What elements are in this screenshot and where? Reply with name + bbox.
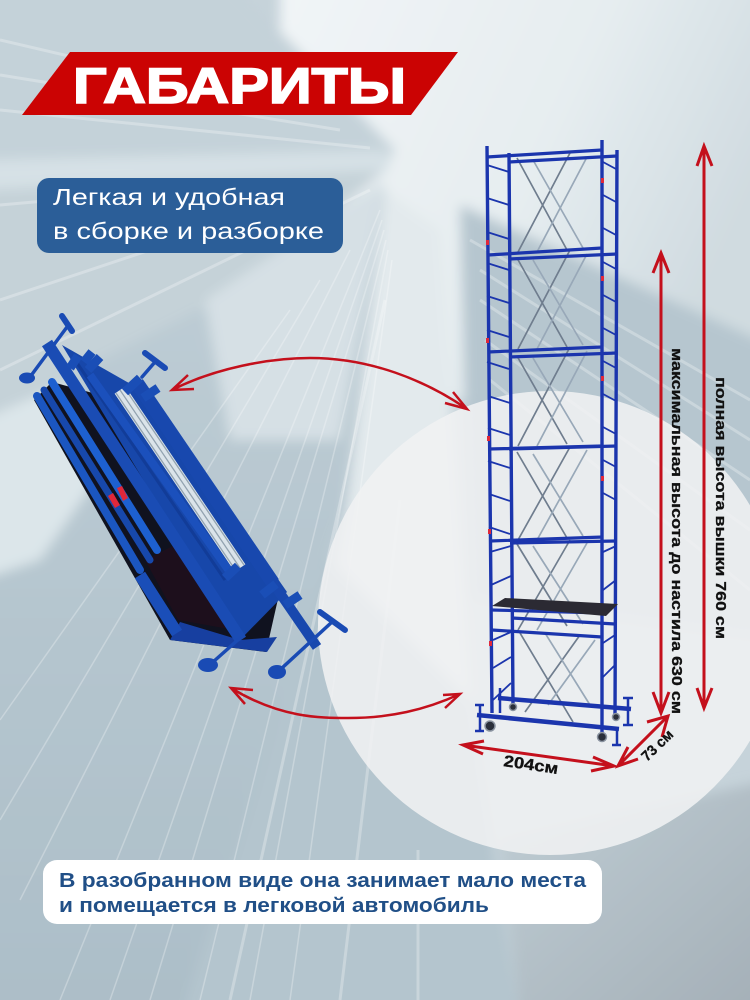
label: max platform height: максимальная высота до настила 630 см xyxy=(668,348,684,714)
callout: easy assembly: в сборке и разборке xyxy=(53,218,324,244)
curved arrow: top xyxy=(172,358,467,409)
platform deck xyxy=(492,598,618,616)
silver rods xyxy=(120,390,240,568)
curved arrow: bottom xyxy=(231,688,460,718)
posts xyxy=(487,140,617,735)
cross braces xyxy=(517,153,580,722)
base frame xyxy=(477,698,631,729)
arrow: depth xyxy=(618,716,668,766)
wheels xyxy=(485,704,620,742)
tube ends xyxy=(70,352,300,605)
title: ГАБАРИТЫ xyxy=(73,58,406,114)
left round tubes xyxy=(37,382,157,570)
folded scaffold bundle xyxy=(19,316,345,679)
title banner xyxy=(22,52,458,115)
assembled scaffold tower xyxy=(475,140,633,745)
dark base of bundle xyxy=(34,382,280,652)
callout: compact when disassembled: и помещается в легковой автомобиль xyxy=(59,895,489,917)
square beams xyxy=(47,343,317,647)
callout: easy assembly xyxy=(37,178,343,253)
ladder rungs xyxy=(487,162,616,700)
label: depth 73 cm: 73 см xyxy=(639,727,677,765)
T-handles and feet xyxy=(30,316,345,668)
callout: compact when disassembled xyxy=(43,860,602,924)
red labels xyxy=(108,486,128,508)
white translucent circle behind tower xyxy=(318,391,750,855)
label: width 204 cm: 204см xyxy=(502,753,559,778)
arrow: width xyxy=(463,741,614,771)
label: full height: полная высота вышки 760 см xyxy=(712,377,728,639)
lower left rail xyxy=(140,575,177,633)
arrow: max platform height xyxy=(653,253,669,713)
blue body between beams xyxy=(62,345,287,640)
callout: compact when disassembled: В разобранном виде она занимает мало места xyxy=(59,870,587,892)
callout: easy assembly: Легкая и удобная xyxy=(53,184,285,210)
horizontal frames xyxy=(487,150,617,637)
arrow: full height xyxy=(697,146,712,708)
red tags xyxy=(486,178,604,646)
outriggers xyxy=(475,688,633,745)
